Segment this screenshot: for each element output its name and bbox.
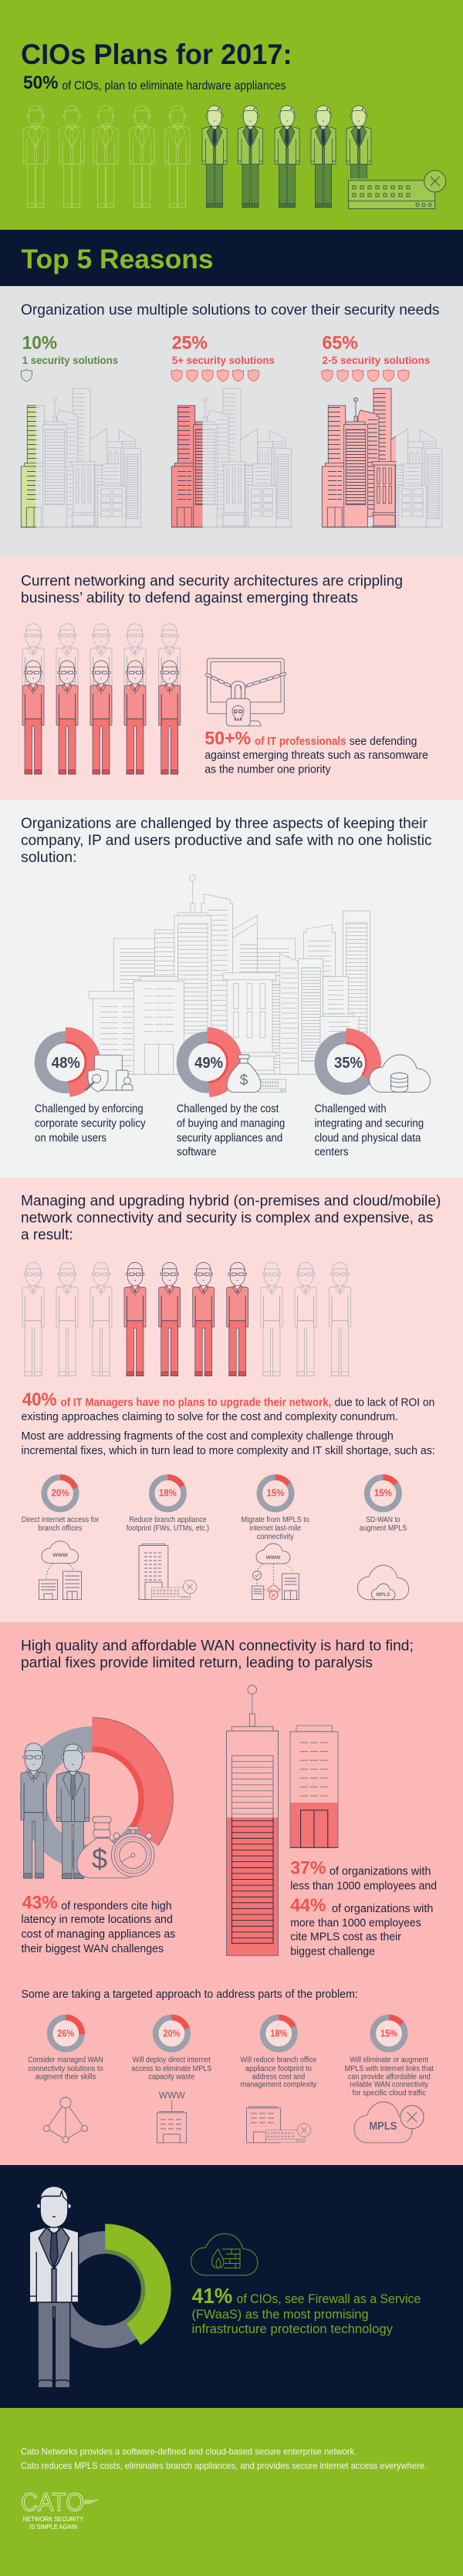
text block: incremental fixes, which in turn lead to more complexity and IT skill shortage, such as: xyxy=(22,1444,435,1457)
stat: 25%: 5+ security solutions xyxy=(172,354,275,366)
icon: money bag and stopwatch: $ xyxy=(92,1843,107,1874)
icon: www building: WWW xyxy=(159,2089,185,2100)
donut chart: 15% xyxy=(259,1477,292,1510)
icon: six shields xyxy=(171,369,259,382)
stat text: 50+%: of IT professionals xyxy=(255,735,346,748)
stat: 10% xyxy=(22,333,118,366)
heading: business’ ability to defend against emerging threats xyxy=(21,590,358,607)
donut chart: 20% xyxy=(44,1477,76,1510)
heading: partial fixes provide limited return, leading to paralysis xyxy=(21,1655,373,1672)
donut chart: 18%: 18% xyxy=(159,1487,177,1499)
subheading: Some are taking a targeted approach to address parts of the problem: xyxy=(22,1988,358,2001)
caption: can provide affordable and xyxy=(348,2073,431,2082)
caption xyxy=(241,2056,317,2089)
caption: appliance footprint to xyxy=(245,2065,312,2073)
caption: appliances and software: software xyxy=(177,1146,216,1158)
caption: for specific cloud traffic xyxy=(353,2089,426,2098)
icon: migrate from MPLS to internet: MPLS xyxy=(269,1588,278,1592)
icon: www cloud with branch offices xyxy=(39,1541,82,1600)
caption: reliable WAN connectivity xyxy=(350,2081,428,2089)
icon: www building xyxy=(157,2089,187,2143)
logo: Cato: NETWORK SECURITY xyxy=(23,2515,84,2523)
illustration: city 65% highlighted xyxy=(322,389,442,527)
caption: cloud and data centers: Challenged with xyxy=(315,1103,387,1115)
stat: 25% xyxy=(172,333,275,366)
stat text: 43%: 43% xyxy=(22,1893,58,1914)
caption: address cost and xyxy=(252,2073,305,2082)
caption: Migrate from MPLS to xyxy=(241,1516,309,1524)
caption xyxy=(360,1516,407,1533)
caption: Will reduce branch office xyxy=(241,2056,317,2065)
stat: 10%: 1 security solutions xyxy=(22,354,118,366)
caption xyxy=(22,1516,100,1533)
stat text: 37% and 44%: more than 1000 employees xyxy=(290,1917,421,1930)
panel: WAN connectivity xyxy=(0,1622,463,2165)
heading: Current networking and security architectures are crippling xyxy=(21,572,403,589)
stat: 65% xyxy=(323,333,431,366)
icon: tablet, shield and mobile user xyxy=(86,1055,133,1092)
stat text: 37% and 44%: less than 1000 employees and xyxy=(290,1879,437,1892)
stat text: 37% and 44%: of organizations with xyxy=(330,1864,431,1877)
caption: cloud and data centers: centers xyxy=(315,1146,349,1158)
stat text: 41% xyxy=(191,2284,421,2336)
donut chart: 15% xyxy=(367,1477,399,1510)
donut chart: 49%: 49% xyxy=(194,1055,223,1072)
caption: footprint (FWs, UTMs, etc.) xyxy=(127,1524,209,1533)
caption: mobile users: on mobile users xyxy=(35,1132,106,1144)
stat text: 40% xyxy=(22,1389,434,1423)
text block: about Cato: Cato Networks provides a software-defined and cloud-based secure enterprise network. xyxy=(21,2446,357,2457)
donut chart: 48%: 48% xyxy=(52,1055,80,1072)
heading: Organization use multiple solutions to cover their security needs xyxy=(21,301,440,318)
icon: MPLS cloud crossed out: MPLS xyxy=(369,2120,397,2133)
stat text: 40%: existing approaches claiming to solve for the cost and complexity conundrum. xyxy=(22,1410,398,1423)
icon: money bag and stopwatch xyxy=(77,1817,154,1878)
panel: top 5 reasons banner xyxy=(0,230,463,286)
caption: management complexity xyxy=(241,2081,316,2089)
stat text: 40%: 40% xyxy=(22,1389,57,1410)
panel: three aspects xyxy=(0,800,463,1177)
caption: appliances and software: security appliances and xyxy=(177,1132,282,1144)
caption xyxy=(28,2056,103,2082)
illustration: short tower 37% filled xyxy=(290,1726,338,1847)
panel: complex and expensive xyxy=(0,1177,463,1622)
heading: company, IP and users productive and safe with no one holistic xyxy=(21,832,432,849)
stat text: 41%: infrastructure protection technology xyxy=(191,2322,394,2336)
icon: migrate from MPLS to internet: www xyxy=(265,1554,281,1561)
pictogram: CIO xyxy=(29,2187,79,2388)
caption: cloud and data centers: cloud and physical data xyxy=(315,1132,421,1144)
caption: appliances and software xyxy=(177,1103,285,1158)
logo: Cato: CATO xyxy=(21,2488,84,2517)
stat text: 41%: (FWaaS) as the most promising xyxy=(191,2308,369,2322)
caption xyxy=(131,2056,212,2082)
stat text: 41%: of CIOs, see Firewall as a Service xyxy=(236,2292,421,2306)
icon: migrate from MPLS to internet xyxy=(252,1544,299,1600)
stat text: 43% xyxy=(22,1893,175,1955)
caption: augment MPLS xyxy=(360,1524,407,1533)
illustration: city skyline xyxy=(90,875,370,1074)
donut chart: 49% xyxy=(179,1034,235,1090)
icon: one shield xyxy=(22,369,32,382)
caption: augment their skills xyxy=(35,2073,96,2082)
panel: firewall as a service xyxy=(0,2165,463,2408)
subtitle xyxy=(23,72,286,93)
text block: Most are addressing fragments of the cost and complexity challenge through xyxy=(22,1429,394,1443)
donut chart: 18% xyxy=(263,2018,295,2049)
title: CIOs Plans for 2017: xyxy=(21,39,292,70)
caption xyxy=(345,2056,434,2098)
icon: chained monitor with skull padlock xyxy=(207,658,285,726)
donut chart: 48% xyxy=(38,1034,93,1090)
icon: MPLS cloud crossed out xyxy=(354,2102,424,2143)
caption: appliances and software: Challenged by the cost xyxy=(177,1103,279,1115)
caption: Direct internet access for xyxy=(22,1516,100,1524)
icon: money bag and appliance xyxy=(227,1055,286,1093)
donut chart: 35%: 35% xyxy=(334,1055,363,1072)
heading xyxy=(21,1637,414,1672)
heading: High quality and affordable WAN connectivity is hard to find; xyxy=(21,1637,414,1654)
stat text: 50+%: against emerging threats such as ransomware xyxy=(204,749,428,762)
text block: about Cato: Cato reduces MPLS costs, eliminates branch appliances, and provides secure internet access everywhere. xyxy=(21,2460,427,2471)
stat: 25%: 25% xyxy=(172,333,208,354)
donut chart: 35% xyxy=(318,1035,374,1091)
icon: hardware appliance crossed out xyxy=(348,170,446,209)
logo: Cato: IS SIMPLE AGAIN xyxy=(29,2523,77,2531)
heading: Managing and upgrading hybrid (on-premises and cloud/mobile) xyxy=(21,1192,441,1209)
stat text: 40%: of IT Managers have no plans to upgrade their network, xyxy=(60,1396,331,1409)
donut chart: 26%: 26% xyxy=(57,2028,75,2039)
pictogram: ten IT managers, four highlighted xyxy=(22,1262,350,1376)
caption: cloud and data centers: integrating and securing xyxy=(315,1117,424,1130)
stat text: 50+%: 50+% xyxy=(204,728,251,749)
stat text: 37% and 44%: 37% xyxy=(290,1858,326,1878)
stat text: 50+%: as the number one priority xyxy=(204,763,331,776)
donut chart: 20%: 20% xyxy=(163,2028,181,2039)
icon: network triangle xyxy=(43,2097,88,2143)
donut chart: 15%: 15% xyxy=(267,1487,285,1499)
caption: appliances and software: of buying and managing xyxy=(177,1117,285,1130)
donut chart: 43% xyxy=(11,1718,173,1880)
subtitle: of CIOs, plan to eliminate hardware appliances xyxy=(62,79,286,93)
heading: network connectivity and security is complex and expensive, as xyxy=(21,1209,434,1226)
donut chart: 20% xyxy=(156,2018,188,2049)
stat text: 37% and 44% xyxy=(290,1858,437,1958)
icon: cloud firewall xyxy=(191,2234,258,2275)
donut chart: 15% xyxy=(373,2018,405,2049)
pictogram: two people xyxy=(21,1743,90,1879)
stat text: 40%: due to lack of ROI on xyxy=(335,1396,434,1409)
text block xyxy=(22,1429,435,1457)
stat text: 41%: 41% xyxy=(192,2284,232,2308)
donut chart: 15%: 15% xyxy=(380,2028,397,2039)
donut chart: 18%: 18% xyxy=(270,2028,288,2039)
caption: MPLS with Internet links that xyxy=(345,2065,434,2073)
panel: intro xyxy=(0,0,463,230)
icon: money bag and appliance: $ xyxy=(240,1072,248,1089)
icon: www cloud with branch offices: www xyxy=(52,1551,68,1558)
stat text: 37% and 44%: of organizations with xyxy=(332,1902,433,1915)
caption: access to eliminate MPLS xyxy=(131,2065,212,2073)
panel: multiple security solutions xyxy=(0,286,463,557)
icon: branch office with appliance xyxy=(247,2106,311,2143)
heading: a result: xyxy=(21,1227,73,1244)
caption: Consider managed WAN xyxy=(28,2056,103,2065)
caption: Reduce branch appliance xyxy=(129,1516,207,1524)
caption: Will eliminate or augment xyxy=(350,2056,428,2065)
logo: Cato xyxy=(21,2488,98,2531)
heading: Organizations are challenged by three aspects of keeping their xyxy=(21,815,428,832)
caption: mobile users: corporate security policy xyxy=(35,1117,146,1130)
illustration: city 25% highlighted xyxy=(171,389,292,527)
caption: internet last-mile xyxy=(249,1524,302,1533)
heading xyxy=(21,1192,441,1244)
stat text: 37% and 44%: biggest challenge xyxy=(290,1945,375,1958)
caption: branch offices xyxy=(39,1524,82,1533)
pictogram: IT professionals front row xyxy=(22,661,181,774)
caption: SD-WAN to xyxy=(366,1516,400,1524)
heading: Top 5 Reasons xyxy=(22,244,213,274)
donut chart: 26% xyxy=(50,2018,82,2049)
text block: about Cato xyxy=(21,2446,427,2471)
stat text: 50+% xyxy=(204,728,428,776)
heading xyxy=(21,572,403,607)
stat text: 37% and 44%: cite MPLS cost as their xyxy=(290,1930,401,1943)
stat: 65%: 65% xyxy=(323,333,358,354)
illustration: tall tower 44% filled xyxy=(227,1685,278,1955)
icon: MPLS cloud inside cloud xyxy=(357,1565,409,1600)
heading: solution: xyxy=(21,849,77,866)
pictogram: ten CIOs, five highlighted xyxy=(23,106,371,207)
panel: emerging threats xyxy=(0,557,463,800)
donut chart: 41% xyxy=(52,2237,158,2342)
donut chart: 20%: 20% xyxy=(51,1487,69,1499)
stat: 65%: 2-5 security solutions xyxy=(323,354,431,366)
icon: six shields xyxy=(322,369,409,382)
caption: Will deploy direct internet xyxy=(133,2056,211,2065)
stat text: 43%: their biggest WAN challenges xyxy=(22,1942,164,1955)
panel: footer xyxy=(0,2408,463,2576)
icon: cloud with database xyxy=(369,1055,431,1093)
icon: MPLS cloud inside cloud: MPLS xyxy=(376,1592,390,1598)
caption: connectivity xyxy=(257,1533,294,1541)
caption: mobile users: Challenged by enforcing xyxy=(35,1103,144,1115)
caption: mobile users xyxy=(35,1103,146,1144)
caption: connectivity solutions to xyxy=(28,2065,103,2073)
pictogram: IT professionals back row xyxy=(22,624,181,737)
icon: branch office with appliance xyxy=(139,1544,197,1599)
stat text: 43%: latency in remote locations and xyxy=(22,1913,173,1926)
stat text: 37% and 44%: 44% xyxy=(290,1895,326,1916)
heading xyxy=(21,815,432,866)
caption xyxy=(127,1516,209,1533)
stat text: 43%: cost of managing appliances as xyxy=(22,1928,175,1941)
stat text: 43%: of responders cite high xyxy=(61,1900,172,1912)
donut chart: 18% xyxy=(152,1477,184,1510)
illustration: city 10% highlighted xyxy=(21,389,141,527)
donut chart: 15%: 15% xyxy=(374,1487,392,1499)
caption xyxy=(241,1516,309,1541)
subtitle: 50% xyxy=(23,72,59,93)
caption: cloud and data centers xyxy=(315,1103,424,1158)
stat text: 50+%: see defending xyxy=(350,735,417,748)
stat: 10%: 10% xyxy=(22,333,57,354)
caption: capacity waste xyxy=(148,2073,195,2082)
